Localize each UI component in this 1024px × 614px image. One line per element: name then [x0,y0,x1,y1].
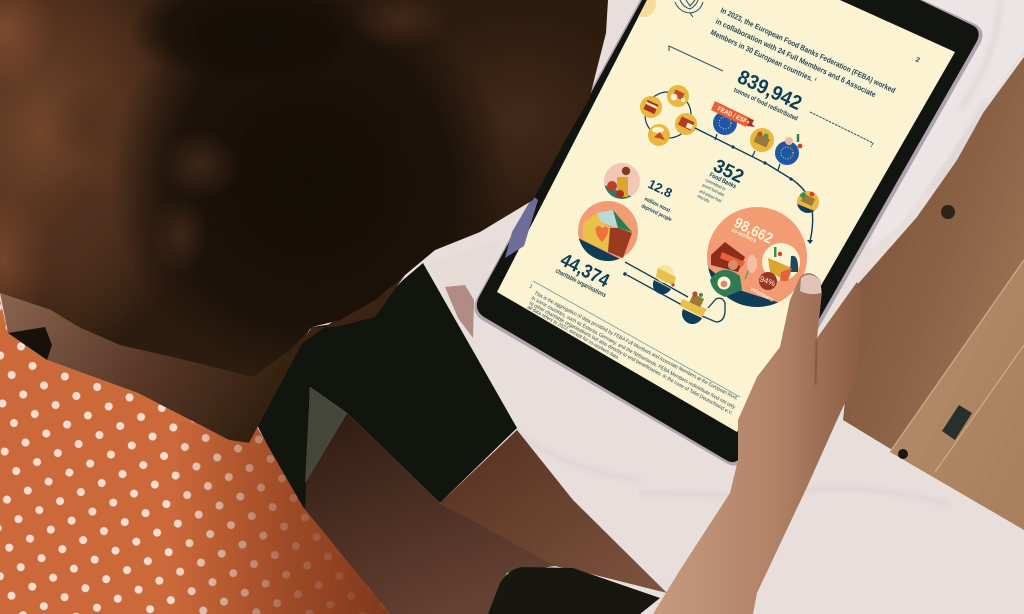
stat: deprived people [640,176,675,223]
icon: weighing scale [648,124,670,146]
stat: charitable organisations: charitable organisations [554,268,607,299]
stat: tonnes of food redistributed: 839,942 [734,66,805,115]
afro hair [0,0,650,390]
volunteer illustration [762,243,800,281]
supply chain line with arrow [695,128,813,244]
stat: food banks: prevent food waste [702,182,726,198]
workers illustration [710,242,757,297]
intro paragraph: Members in 30 European countries. ¹ [709,28,818,85]
intro paragraph: In 2023, the European Food Banks Federation (FEBA) worked [719,6,897,95]
page number: 2 [914,56,921,65]
stat: deprived people: million most [643,196,671,214]
stat: food banks: and reduce food [699,188,723,204]
stat: food banks: Food Banks [708,172,737,191]
footnote text: all data refers to 2022, except for co-workers data. [526,305,620,361]
food basket circle [797,191,819,213]
stat: deprived people: deprived people [640,203,672,223]
stat: tonnes of food redistributed: tonnes of food redistributed [732,87,799,123]
icon: market stall [640,96,662,118]
patterned orange shirt [0,300,390,614]
icon: caring hands [675,0,703,17]
stat circle: co-workers and volunteers: 98,662 [731,214,776,248]
badge: 94 percent: 94% [758,274,776,288]
envelope label [942,405,972,440]
delivery routes with arrow [623,262,725,322]
icon: tractor [667,85,689,107]
footnote text: In some countries, such as Estonia, Germany, and the Netherlands, FEBA Members redistribute food not only [530,295,736,411]
neck and face [0,275,405,443]
tablet screen page [497,0,955,432]
footnote text: 1 [528,283,534,290]
EU funding circle with FEAD/ESF+ banner [711,101,755,140]
icon: house with heart circle [578,201,638,261]
envelope stud [941,205,955,219]
lavender cloth behind tablet [505,196,538,258]
decorative page corner circle [638,0,656,17]
bracket rule right [810,112,873,147]
tablet body [474,0,983,466]
hand holding tablet [653,273,862,614]
icon: people in pink circle [604,163,640,199]
footnote rule [533,281,740,397]
stat circle: co-workers and volunteers [707,207,807,307]
kraft paper envelope [843,57,1024,530]
stat: food banks [697,156,747,204]
food crate circle [750,128,774,157]
stat: food banks: committed to [705,177,727,192]
bracket rule left [669,46,723,71]
stat: food banks: 352 [710,156,747,188]
icon: delivery van [653,265,676,294]
icon: loaded van [680,291,707,324]
intro paragraph: in collaboration with 24 Full Members and 6 Associate [714,17,877,99]
food supply ring [640,85,697,146]
stat: charitable organisations: 44,374 [557,250,613,292]
stat circle: co-workers and volunteers: volunteers [749,286,774,304]
thumbnail [800,275,821,294]
stat: food banks: insecurity [697,193,711,204]
footnote text: to other charitable organisations but also directly to end beneficiaries. In the case of Tafel Deutschland e.V. [528,300,734,417]
footnote text: This is the aggregation of data provided by FEBA Full Members and Associate Members at the European level. [533,290,739,402]
seated arms and black clothing [253,263,667,614]
knee behind sleeve [445,285,474,338]
stat circle: co-workers and volunteers: co-workers [730,227,758,245]
EU funding circle with FEAD/ESF+ banner: FEAD / ESF+ [716,105,751,127]
EU circle with vegetables [775,134,802,170]
icon: factory [675,113,697,135]
stat: deprived people: 12.8 [646,176,675,201]
envelope eyelet [898,449,908,459]
